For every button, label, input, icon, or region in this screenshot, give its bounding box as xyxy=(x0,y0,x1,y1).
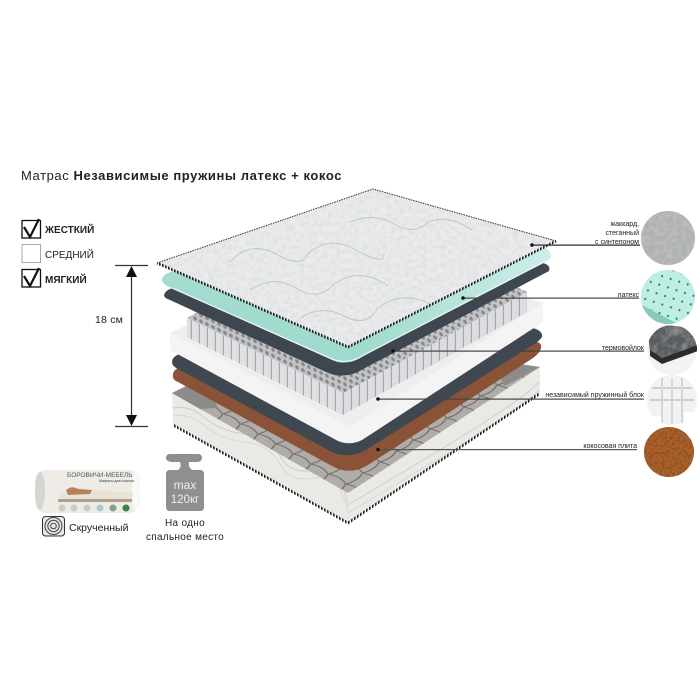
label: jacquard: жаккард, xyxy=(610,221,639,228)
swatch: jacquard xyxy=(641,211,695,265)
callout: latex line xyxy=(461,296,639,300)
callout lines xyxy=(376,243,644,451)
jacquard embossed swirls xyxy=(230,217,472,320)
title: Матрас Независимые пружины латекс + кокос xyxy=(21,168,342,183)
weight caption: На одно xyxy=(165,518,205,529)
exploded mattress layers xyxy=(157,189,556,523)
layer: dark felt upper xyxy=(164,220,549,376)
swatch: latex xyxy=(640,269,696,325)
callout: spring line xyxy=(376,397,644,401)
layer: white foam xyxy=(170,282,543,443)
swatch: felt xyxy=(646,324,698,376)
label: felt: термовойлок xyxy=(602,344,645,352)
firmness checklist xyxy=(22,219,94,287)
callout labels xyxy=(545,221,645,450)
swatch: spring block xyxy=(647,375,698,426)
height dimension arrow xyxy=(95,266,148,426)
layer: coconut slab xyxy=(173,300,541,471)
icon: max weight xyxy=(166,454,204,511)
package brand: БОРОВИЧИ-МЕБЕЛЬ xyxy=(67,472,133,479)
callout: coconut line xyxy=(376,448,637,451)
rolled label: Скрученный xyxy=(69,522,129,534)
layer: pocket springs xyxy=(187,270,527,415)
label: spring block: независимый пружинный блок xyxy=(545,391,645,399)
callout: jacquard line xyxy=(530,243,640,247)
checkbox: жесткий: ЖЕСТКИЙ xyxy=(44,223,94,236)
weight caption: спальное место xyxy=(146,532,224,543)
callout labels: стеганный xyxy=(606,229,639,237)
label: latex: латекс xyxy=(618,292,639,299)
callout: felt line xyxy=(391,349,644,353)
rolled mattress package xyxy=(35,470,140,513)
layer: latex xyxy=(162,205,551,363)
callout labels: с синтепоном xyxy=(595,239,639,246)
layer: base mattress xyxy=(172,330,540,523)
swatch: coconut xyxy=(644,427,694,477)
rolled mattress package: Матрасы для счастья xyxy=(99,479,134,483)
icon: max weight: 120кг xyxy=(171,494,199,506)
height label: 18 см xyxy=(95,314,123,326)
checkbox: мягкий: МЯГКИЙ xyxy=(45,273,87,286)
icon: rolled spiral xyxy=(42,516,64,536)
icon: max weight: max xyxy=(174,478,196,492)
label: coconut: кокосовая плита xyxy=(583,443,637,450)
weight caption xyxy=(146,518,224,543)
layer: dark felt lower xyxy=(172,280,542,455)
layer: jacquard top xyxy=(157,189,556,347)
checkbox: средний: СРЕДНИЙ xyxy=(45,248,94,261)
